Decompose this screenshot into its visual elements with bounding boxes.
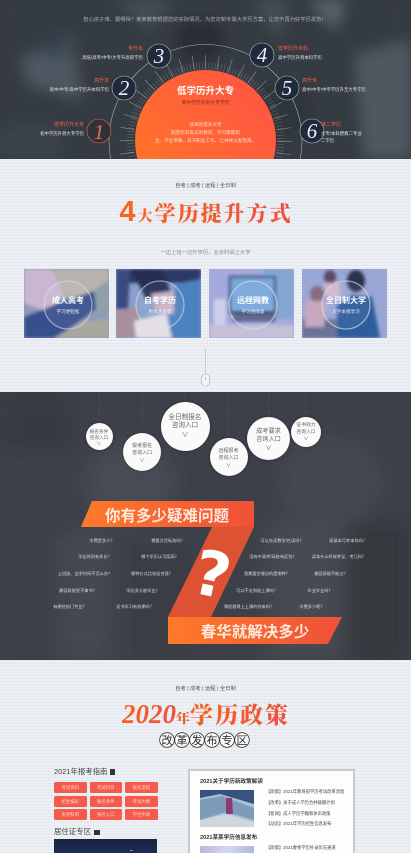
bubble: certificate validity: 咨询入口 bbox=[296, 430, 316, 434]
label: level 1: 低学历升大专 bbox=[54, 122, 84, 128]
centre circle text: 核举的提升大专 bbox=[189, 122, 222, 127]
top band bbox=[81, 501, 254, 527]
subheading: circled characters: 区 bbox=[236, 735, 248, 747]
bubble: full-time bbox=[160, 402, 210, 451]
photo card: full-time university bbox=[302, 269, 387, 338]
question list: left and right columns: 学费多少呢？ bbox=[299, 604, 325, 609]
label: level 6 bbox=[321, 122, 362, 143]
news image 2 bbox=[200, 846, 254, 853]
label: level 5: 高升专 bbox=[302, 78, 317, 84]
background photo: graduates bbox=[10, 0, 411, 159]
heading: residence permit: 居住证专区 bbox=[54, 827, 91, 836]
bubble: certificate validity bbox=[291, 416, 321, 446]
label: level 6: 读二学历 bbox=[321, 122, 341, 128]
bubble: adult exam requirements: ∨ bbox=[265, 444, 272, 452]
heading: 2021 guide: 2021年报考指南 bbox=[54, 767, 107, 776]
question list: left and right columns: 我需要交哪边的是哪种？ bbox=[244, 571, 290, 576]
bubble: distance learning: 咨询入口 bbox=[218, 455, 238, 461]
number badge 1: 1 bbox=[94, 120, 104, 144]
label: level 1: 初中学历升到大专学历 bbox=[40, 131, 84, 136]
button grid: 学位申请 bbox=[132, 812, 150, 817]
label: level 2 bbox=[49, 78, 109, 92]
button grid bbox=[54, 782, 158, 820]
bubble: adult exam requirements: 咨询入口 bbox=[256, 436, 281, 442]
question mark: ? bbox=[187, 535, 237, 614]
centre circle text: 期望您有再去的教育、学习掌握职 bbox=[171, 130, 240, 135]
graphic: big number 7 with question mark: 春华就解决多少 bbox=[201, 622, 309, 641]
news heading 1: 2021关于学历新政策解读 bbox=[200, 779, 263, 785]
question list: left and right columns: 学业时间有多长？ bbox=[78, 554, 112, 559]
panel: hero with study levels dial bbox=[0, 0, 411, 159]
number badge 2: 2 bbox=[119, 76, 130, 100]
label: level 2: 高升本 bbox=[94, 78, 109, 84]
button grid: 报名流程 bbox=[132, 785, 150, 790]
label: level 4 bbox=[278, 46, 322, 60]
panel: policy section bbox=[0, 660, 411, 853]
subtitle: 一边上班一边升学历，业余时间上大学 bbox=[160, 250, 251, 256]
subheading: circled characters bbox=[159, 732, 250, 748]
bubble: certificate validity: ∨ bbox=[304, 436, 308, 442]
question list: left and right columns: 读本什么时候考证、考几科？ bbox=[312, 554, 366, 559]
question list: left and right columns: 学费是多少？ bbox=[89, 538, 115, 543]
question list: left and right columns: 可以不去到校上课吗？ bbox=[236, 588, 278, 593]
number badge 6: 6 bbox=[307, 119, 318, 143]
heading: 2020 policy: 2020年学历政策 bbox=[122, 699, 290, 729]
bubble: application bbox=[123, 433, 161, 471]
category tags: 自考 | 成考 | 远程 | 全日制 bbox=[175, 183, 236, 189]
centre circle text: 业、学业带路、日干职业工作、让书并以发现来。 bbox=[155, 138, 256, 143]
bubble: entry conditions bbox=[86, 423, 112, 450]
bubble: application: ∨ bbox=[139, 458, 144, 464]
subheading: circled characters: 发 bbox=[192, 733, 202, 747]
label: level 3: 高低/高专/中专/大专升高职学历 bbox=[82, 55, 143, 60]
question list: left and right columns: 上班族、业余时间不怎么办？ bbox=[58, 571, 112, 576]
bubble: distance learning: 远程报考 bbox=[218, 448, 238, 454]
bubble: distance learning: ∨ bbox=[226, 463, 231, 469]
photo card: online education bbox=[209, 269, 294, 338]
bubble: full-time: ∨ bbox=[182, 432, 188, 439]
question list: left and right columns: 可以先读教学/在读吗？ bbox=[260, 538, 304, 543]
question list: left and right columns: 哪个学历认可度高？ bbox=[141, 554, 179, 559]
graphic: big number 7 with question mark bbox=[81, 501, 342, 644]
bubble: entry conditions: 咨询入口 bbox=[90, 435, 108, 440]
icon: scroll mouse bbox=[201, 348, 210, 386]
bubble: adult exam requirements bbox=[247, 416, 290, 460]
panel: four upgrade methods bbox=[0, 159, 411, 392]
number badge 6 bbox=[300, 119, 324, 143]
button grid: 考试科目 bbox=[97, 785, 115, 790]
bubble: entry conditions: ∨ bbox=[97, 441, 101, 446]
dial graphic: arc, ticks and sun circle bbox=[86, 42, 324, 159]
diagonal stroke of the seven bbox=[168, 527, 254, 617]
button grid: 免考科目 bbox=[61, 812, 79, 817]
label: level 3 bbox=[82, 46, 143, 60]
number badge 5 bbox=[275, 76, 299, 100]
subheading: circled characters: 改 bbox=[162, 733, 172, 747]
photo card: adult exam bbox=[24, 269, 109, 338]
news list 1: 【动态】2021年学历招生信息发布 bbox=[266, 821, 331, 826]
button grid: 招生报彩 bbox=[61, 798, 79, 804]
category tags: 自考 | 成考 | 远程 | 全日制 bbox=[175, 686, 236, 692]
number badge 4: 4 bbox=[257, 43, 268, 67]
centre circle text: 低学历升大专 bbox=[177, 86, 234, 97]
number badge 1 bbox=[87, 119, 111, 144]
question list: left and right columns bbox=[53, 538, 367, 609]
label: level 4: 低学历升本科 bbox=[278, 46, 308, 52]
label: level 5 bbox=[302, 78, 366, 92]
photo card: self-study: 更具含金量 bbox=[149, 308, 172, 315]
number badge 5: 5 bbox=[282, 76, 292, 100]
number badge 3: 3 bbox=[153, 44, 164, 68]
bubble: certificate validity: 证书效力 bbox=[296, 422, 316, 428]
photo card: self-study: 自考学历 bbox=[144, 295, 176, 305]
bubble: entry conditions: 报名条件 bbox=[90, 429, 108, 434]
news list 2: 【政策】2021春季学历扑录优先通道 bbox=[266, 845, 336, 850]
number badge 3 bbox=[147, 44, 171, 68]
panel: questions section bbox=[0, 392, 411, 660]
question list: left and right columns: 最容易接受不拿书？ bbox=[59, 588, 97, 593]
bubble: full-time: 全日制报名 bbox=[169, 414, 201, 421]
label: level 2: 高中/中专/高中学历升本科学历 bbox=[49, 87, 109, 92]
bubble: full-time: 咨询入口 bbox=[172, 422, 198, 429]
news list 1: 【新闻】成人学历学籍和休讯政策 bbox=[266, 811, 330, 816]
background photo: blurred people bbox=[12, 404, 408, 656]
question list: left and right columns: 有哪些热门专业？ bbox=[53, 604, 87, 609]
photo card: adult exam: 成人高考 bbox=[52, 295, 84, 305]
question list: left and right columns: 最容易能不能过？ bbox=[314, 571, 348, 576]
centre circle text: 高中学历升到大专学历 bbox=[182, 100, 229, 106]
label: level 4: 高中学历升到本科学历 bbox=[278, 55, 322, 60]
photo card: full-time university: 大学本部享习 bbox=[332, 308, 360, 315]
subheading: circled characters: 革 bbox=[176, 733, 188, 747]
photo card: online education: 学习更随意 bbox=[242, 308, 265, 315]
subheading: circled characters: 布 bbox=[206, 734, 218, 747]
panel: news box bbox=[188, 769, 355, 853]
label: level 3: 专升本 bbox=[128, 46, 143, 52]
question list: left and right columns: 课程跟得上上课的你来吗？ bbox=[224, 604, 274, 609]
hero intro text: 担心孩子难、跟哪得？某某教育根据您的实际情况，为您定制专属大学历方案，让您不再为好学历发愁！ bbox=[83, 17, 327, 23]
news heading 2: 2021某某学历信息发布 bbox=[200, 835, 257, 841]
news list 1: 【改革】关于成人学历合并裁撤计划 bbox=[266, 800, 335, 805]
label: level 5: 高中/中专/中专学历升至大专学历 bbox=[302, 87, 366, 92]
question list: left and right columns: 证书学习有效果吗？ bbox=[116, 604, 154, 609]
question list: left and right columns: 没有中高考/高校有区别？ bbox=[249, 554, 297, 559]
photo card: self-study bbox=[116, 269, 201, 338]
image: night city bbox=[54, 839, 157, 853]
label: level 1 bbox=[40, 122, 84, 136]
question list: left and right columns: 学历多久能毕业？ bbox=[126, 588, 160, 593]
bubble: application: 报考报名 bbox=[132, 443, 152, 449]
bubble: adult exam requirements: 成考要求 bbox=[256, 428, 281, 434]
bottom band bbox=[168, 617, 342, 644]
button grid: 报名条件 bbox=[97, 798, 115, 804]
question list: left and right columns: 毕业学业吗？ bbox=[307, 588, 333, 593]
band headings: 你有多少疑难问题 bbox=[105, 506, 229, 525]
news image 1 bbox=[200, 790, 254, 827]
hanging strings bbox=[98, 392, 306, 436]
button grid: 考试资料 bbox=[61, 785, 79, 790]
button grid: 报名入口 bbox=[97, 812, 115, 817]
photo card: online education: 远程网教 bbox=[237, 295, 269, 305]
subheading: circled characters: 专 bbox=[222, 733, 232, 747]
photo card: full-time university: 全日制大学 bbox=[326, 295, 366, 305]
label: level 6: 大专/本科攒教二专业 bbox=[321, 131, 362, 136]
button grid: 考试大纲 bbox=[132, 798, 150, 804]
photo card: adult exam: 学习更轻松 bbox=[57, 308, 80, 315]
question list: left and right columns: 现基本可考本科吗？ bbox=[329, 538, 367, 543]
bubble: application: 咨询入口 bbox=[132, 450, 152, 456]
question list: left and right columns: 需要文凭标准吗？ bbox=[151, 538, 185, 543]
label: level 6: 二学历 bbox=[321, 138, 334, 143]
question list: left and right columns: 哪种方式比较适合我？ bbox=[131, 571, 173, 576]
news list 1: 【政策】2021年教育部学历考试改革消息 bbox=[266, 789, 344, 794]
centre circle text bbox=[155, 86, 256, 143]
number badge 4 bbox=[250, 43, 274, 67]
number badge 2 bbox=[112, 76, 136, 100]
bubble: distance learning bbox=[210, 438, 248, 476]
orange centre circle bbox=[135, 70, 276, 211]
